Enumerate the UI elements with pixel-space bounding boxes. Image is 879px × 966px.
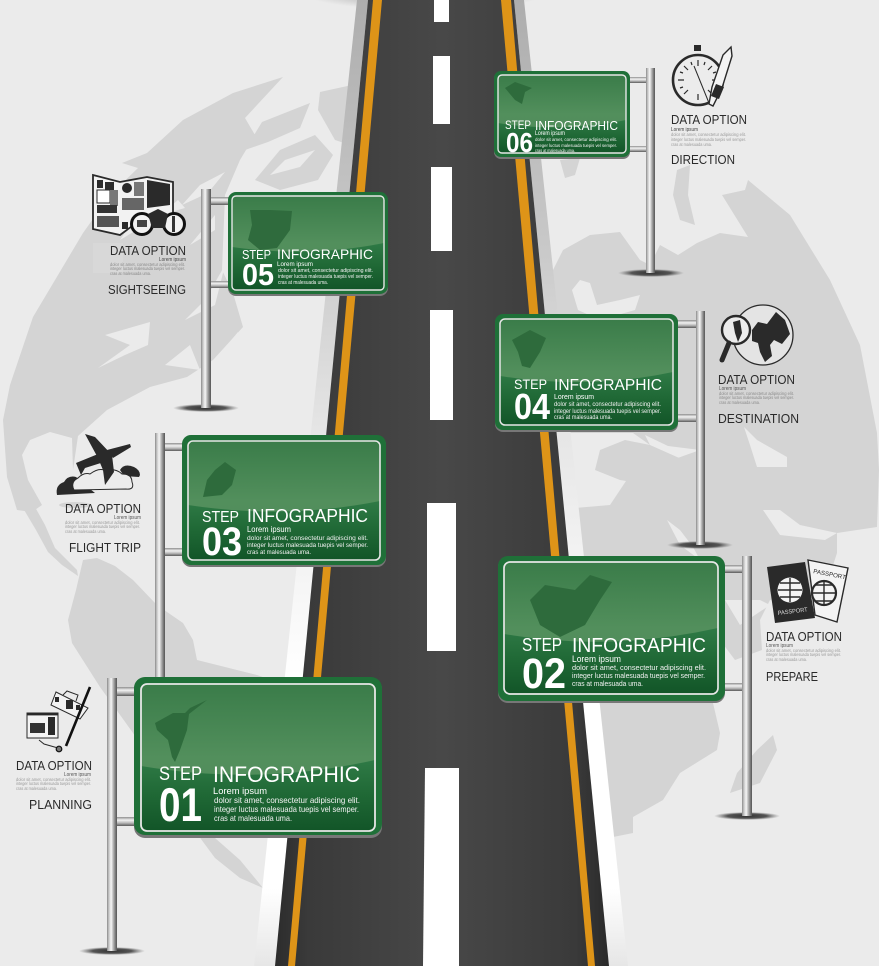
sign: step 03: 03 [202,520,242,564]
label: prepare: Lorem ipsum [766,643,793,649]
sign: step 06: Lorem ipsum [535,131,565,137]
label: planning: cras at malesuada uma. [16,786,57,791]
label: flight trip: dolor sit amet, consectetur adipiscing elit. [65,520,140,525]
label: destination: dolor sit amet, consectetur adipiscing elit. [719,391,794,396]
sign: step 05: INFOGRAPHIC [277,246,373,262]
label: prepare: cras at malesuada uma. [766,657,807,662]
icon: globe and magnifier [722,305,793,365]
label: sightseeing [93,243,186,297]
sign: step 04: cras at malesuada uma. [554,415,612,421]
sign: step 04: Lorem ipsum [554,394,594,401]
label: prepare: DATA OPTION [766,629,842,644]
post for step 02 [714,556,780,820]
label: direction: DATA OPTION [671,112,747,127]
label: planning: dolor sit amet, consectetur adipiscing elit. [16,777,91,782]
icon: passports: PASSPORT [778,607,808,617]
label: direction: integer luctus malesuada tuepis vel semper. [671,137,746,142]
icon: passports: PASSPORT [813,569,846,581]
right shoulder [514,0,628,966]
label: sightseeing: Lorem ipsum [159,257,186,263]
label: direction: DIRECTION [671,152,735,167]
label: sightseeing: integer luctus malesuada tuepis vel semper. [110,266,185,271]
sign: step 06 [494,71,630,159]
sign: step 04 [495,314,678,432]
sign: step 03: dolor sit amet, consectetur adipiscing elit. [247,535,368,542]
sign: step 03: Lorem ipsum [247,525,291,534]
label: prepare: integer luctus malesuada tuepis vel semper. [766,652,841,657]
sign: step 03: integer luctus malesuada tuepis vel semper. [247,542,368,549]
sign: step 06: integer luctus malesuada tuepis vel semper. [535,143,617,149]
sign: step 01 [134,677,382,838]
label: destination: Lorem ipsum [719,386,746,392]
sign: step 02: Lorem ipsum [572,654,621,664]
label: planning: integer luctus malesuada tuepis vel semper. [16,781,91,786]
post for step 06 [618,68,684,277]
sign: step 02: STEP [522,635,562,655]
world map right [548,158,879,837]
sign: step 02: integer luctus malesuada tuepis vel semper. [572,671,705,680]
sign: step 02 [498,556,725,703]
sign: step 06: 06 [506,127,533,158]
road [254,0,628,966]
sign: step 01: 01 [159,778,202,831]
icon: map and binoculars [93,175,184,235]
left shoulder [254,0,368,966]
label: direction: dolor sit amet, consectetur adipiscing elit. [671,132,746,137]
sign: step 01: integer luctus malesuada tuepis vel semper. [214,805,359,814]
sign: step 06: INFOGRAPHIC [535,118,618,133]
label: planning: DATA OPTION [16,758,92,773]
post for step 01 [79,678,145,955]
label: flight trip: FLIGHT TRIP [69,540,141,555]
label: flight trip: cras at malesuada uma. [65,529,106,534]
post for step 04 [667,311,733,549]
label: direction [671,112,747,167]
icon: calendar and luggage [27,687,90,752]
label: flight trip [59,501,141,555]
sign: step 02: INFOGRAPHIC [572,635,706,657]
sign: step 05 [228,192,388,296]
label: destination: DATA OPTION [718,372,795,387]
label: destination [718,372,799,426]
sign: step 04: integer luctus malesuada tuepis vel semper. [554,409,661,415]
label: planning: Lorem ipsum [64,772,91,778]
label: prepare: PREPARE [766,669,818,684]
sign: step 05: integer luctus malesuada tuepis vel semper. [278,274,373,280]
centre dashes [423,0,459,966]
sign: step 04: 04 [514,386,550,427]
label: destination: DESTINATION [718,411,799,426]
sign: step 06: cras at malesuada uma. [535,148,575,154]
label: direction: Lorem ipsum [671,127,698,133]
sign: step 06: dolor sit amet, consectetur adipiscing elit. [535,137,617,143]
sign: step 02: cras at malesuada uma. [572,679,643,688]
icon: passports [767,560,848,623]
world map left [3,77,352,888]
sign: step 02: dolor sit amet, consectetur adipiscing elit. [572,663,706,672]
sign: step 05: 05 [242,257,274,292]
label: planning: PLANNING [29,797,92,812]
asphalt [275,0,609,966]
sign: step 02: 02 [522,650,566,698]
sign: step 05: Lorem ipsum [277,261,313,268]
label: sightseeing: dolor sit amet, consectetur adipiscing elit. [110,262,185,267]
label: sightseeing: SIGHTSEEING [108,282,186,297]
sign: step 03: STEP [202,509,239,526]
label: planning [16,758,92,812]
label: prepare: dolor sit amet, consectetur adipiscing elit. [766,648,841,653]
label: direction: cras at malesuada uma. [671,142,712,147]
label: prepare [766,629,842,684]
right edge line [501,0,595,966]
sign: step 04: dolor sit amet, consectetur adipiscing elit. [554,402,661,408]
label: flight trip: DATA OPTION [65,501,141,516]
post for step 03 [155,433,184,683]
sign: step 01: cras at malesuada uma. [214,814,292,823]
sign: step 01: Lorem ipsum [213,786,267,797]
label: flight trip: Lorem ipsum [114,515,141,521]
sign: step 01: STEP [159,764,202,785]
sign: step 05: STEP [242,247,271,262]
label: flight trip: integer luctus malesuada tuepis vel semper. [65,524,140,529]
post for step 05 [173,189,239,412]
shadow at top of the road [305,0,545,10]
sign: step 05: cras at malesuada uma. [278,280,328,286]
sign: step 03: INFOGRAPHIC [247,506,368,526]
icon: compass and pen [673,45,732,106]
sign: step 06: STEP [505,118,531,132]
sign: step 03 [182,435,386,567]
sign: step 04: INFOGRAPHIC [554,377,662,394]
label: sightseeing: cras at malesuada uma. [110,271,151,276]
sign: step 01: INFOGRAPHIC [213,762,360,787]
sign: step 05: dolor sit amet, consectetur adipiscing elit. [278,268,373,274]
label: destination: cras at malesuada uma. [719,400,760,405]
sign: step 04: STEP [514,376,547,392]
label: destination: integer luctus malesuada tuepis vel semper. [719,395,794,400]
icon: airplane and clouds [57,434,140,495]
sign: step 01: dolor sit amet, consectetur adipiscing elit. [214,796,360,805]
label: sightseeing: DATA OPTION [110,243,186,258]
left edge line [288,0,382,966]
sign: step 03: cras at malesuada uma. [247,549,311,556]
